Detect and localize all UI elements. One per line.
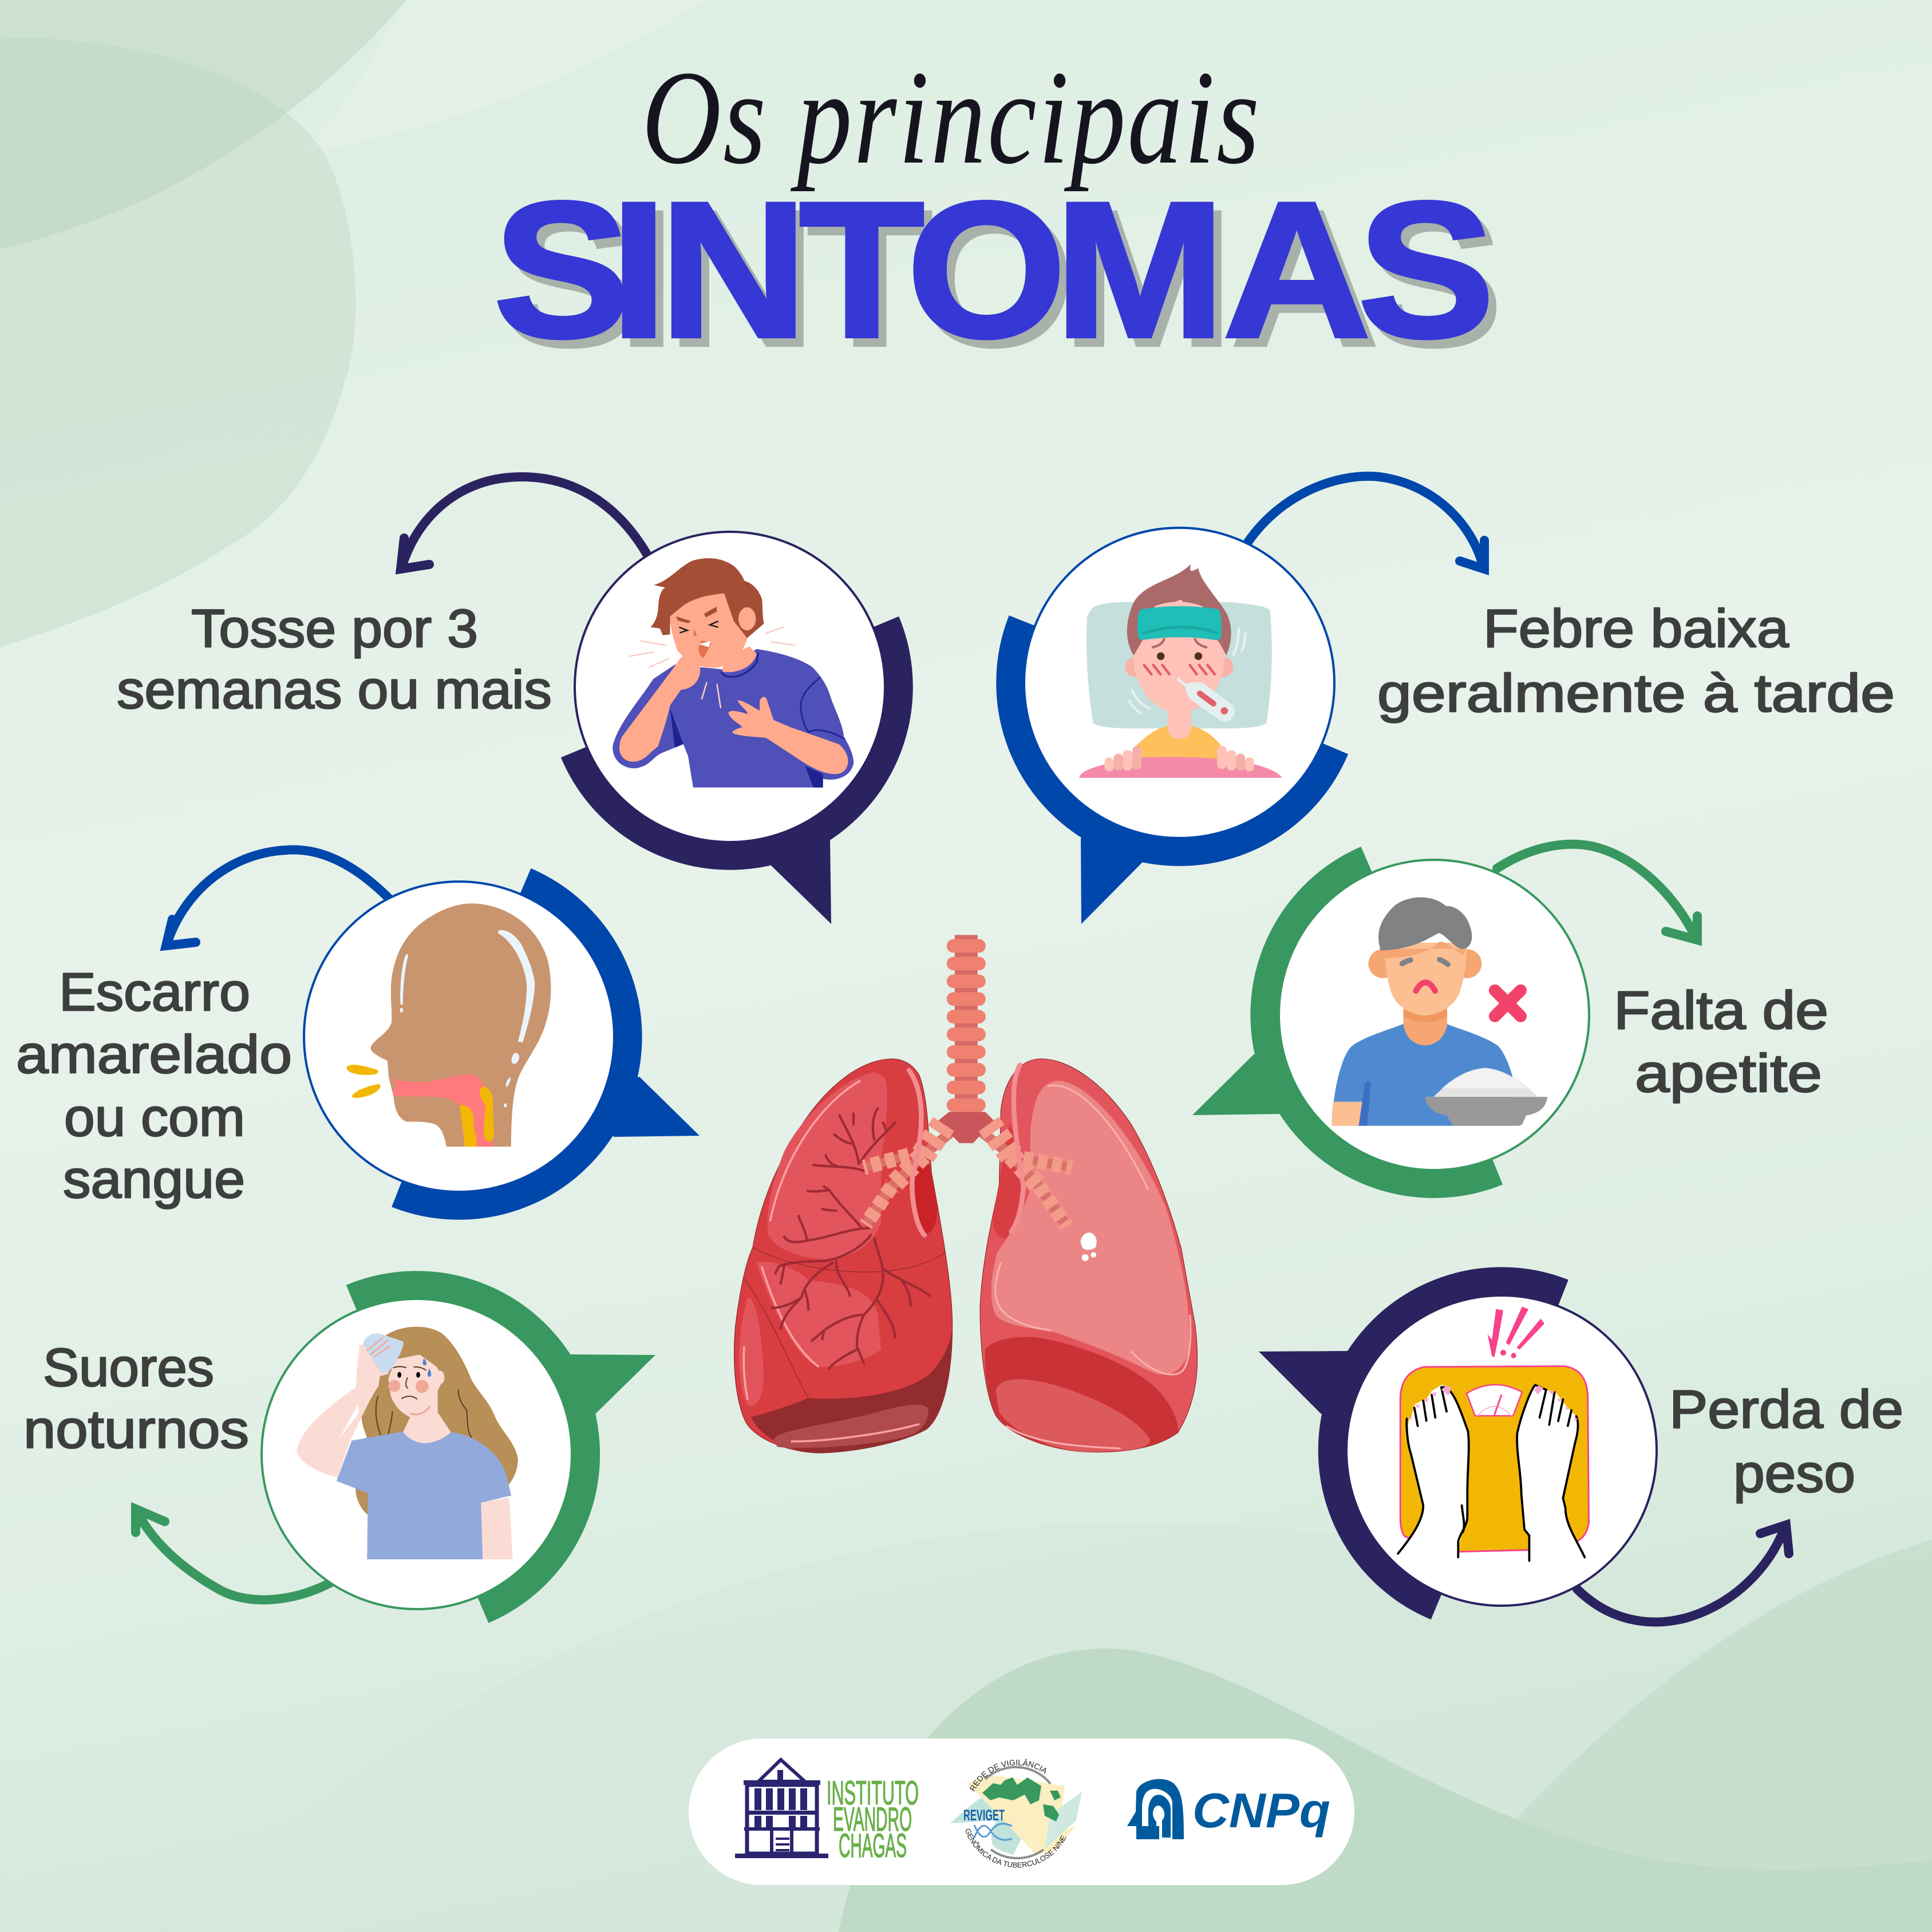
symptom label: night sweats	[23, 1337, 249, 1459]
logo: Reviget: REVIGET	[963, 1807, 1005, 1824]
symptom label: sputum: Escarro	[59, 962, 250, 1022]
symptom label: sputum: ou com	[64, 1087, 245, 1147]
symptom label: fever: Febre baixa	[1483, 598, 1789, 658]
symptom label: appetite	[1614, 980, 1828, 1103]
arrow: fever	[1248, 476, 1484, 569]
symptom label: night sweats: noturnos	[23, 1399, 249, 1459]
illustration: lungs	[734, 935, 1198, 1453]
symptom label: night sweats: Suores	[43, 1337, 214, 1397]
symptom label: fever: geralmente à tarde	[1377, 663, 1895, 723]
symptom label: sputum	[16, 962, 292, 1209]
trachea and bronchi	[864, 935, 1072, 1226]
logo: Instituto Evandro Chagas	[735, 1760, 919, 1864]
arrow: appetite	[1497, 844, 1697, 940]
icon: sick child with thermometer	[1079, 564, 1282, 778]
logo: CNPq	[1127, 1779, 1330, 1839]
title: Os principais: Os principais	[642, 44, 1259, 192]
arrow: weight loss	[1577, 1525, 1789, 1622]
panel: appetite	[1192, 859, 1589, 1184]
symptom label: appetite: apetite	[1635, 1043, 1822, 1103]
logo: Instituto Evandro Chagas: EVANDRO	[833, 1801, 912, 1838]
icon: man refusing food	[1332, 897, 1547, 1126]
symptom label: fever	[1377, 598, 1895, 723]
symptom label: weight loss: peso	[1733, 1443, 1855, 1503]
panel: fever	[1010, 528, 1336, 924]
logo bar	[689, 1739, 1354, 1885]
icon: coughing man	[613, 558, 854, 788]
symptom label: weight loss: Perda de	[1669, 1379, 1903, 1439]
panel: weight loss	[1259, 1281, 1657, 1607]
title: SINTOMAS: SINTOMAS	[493, 161, 1495, 378]
symptom label: cough	[117, 598, 552, 720]
symptom label: weight loss	[1669, 1379, 1903, 1503]
icon: head with yellow phlegm	[346, 903, 551, 1147]
symptom label: appetite: Falta de	[1614, 980, 1828, 1040]
symptom label: cough: Tosse por 3	[191, 598, 478, 658]
arrow: cough	[401, 477, 647, 569]
panel: night sweats	[262, 1285, 655, 1610]
panel: sputum	[304, 881, 700, 1206]
logo: Instituto Evandro Chagas: INSTITUTO	[827, 1775, 919, 1812]
logo: Reviget: REDE DE VIGILÂNCIA	[970, 1759, 1046, 1792]
icon: woman sweating	[297, 1327, 518, 1559]
logo: Reviget: GENÔMICA DA TUBERCULOSE N/NE	[966, 1828, 1066, 1868]
logo: Reviget	[950, 1759, 1082, 1868]
panel: cough	[574, 532, 899, 924]
symptom label: sputum: amarelado	[16, 1024, 292, 1084]
icon: feet on scale	[1398, 1307, 1589, 1561]
arrow: night sweats	[136, 1509, 330, 1600]
symptom label: cough: semanas ou mais	[117, 659, 552, 720]
title: SINTOMAS: SINTOMAS	[501, 170, 1503, 386]
logo: CNPq: CNPq	[1192, 1784, 1330, 1838]
arrow: sputum	[166, 850, 389, 946]
symptom label: sputum: sangue	[63, 1149, 245, 1209]
logo: Instituto Evandro Chagas: CHAGAS	[839, 1827, 907, 1864]
